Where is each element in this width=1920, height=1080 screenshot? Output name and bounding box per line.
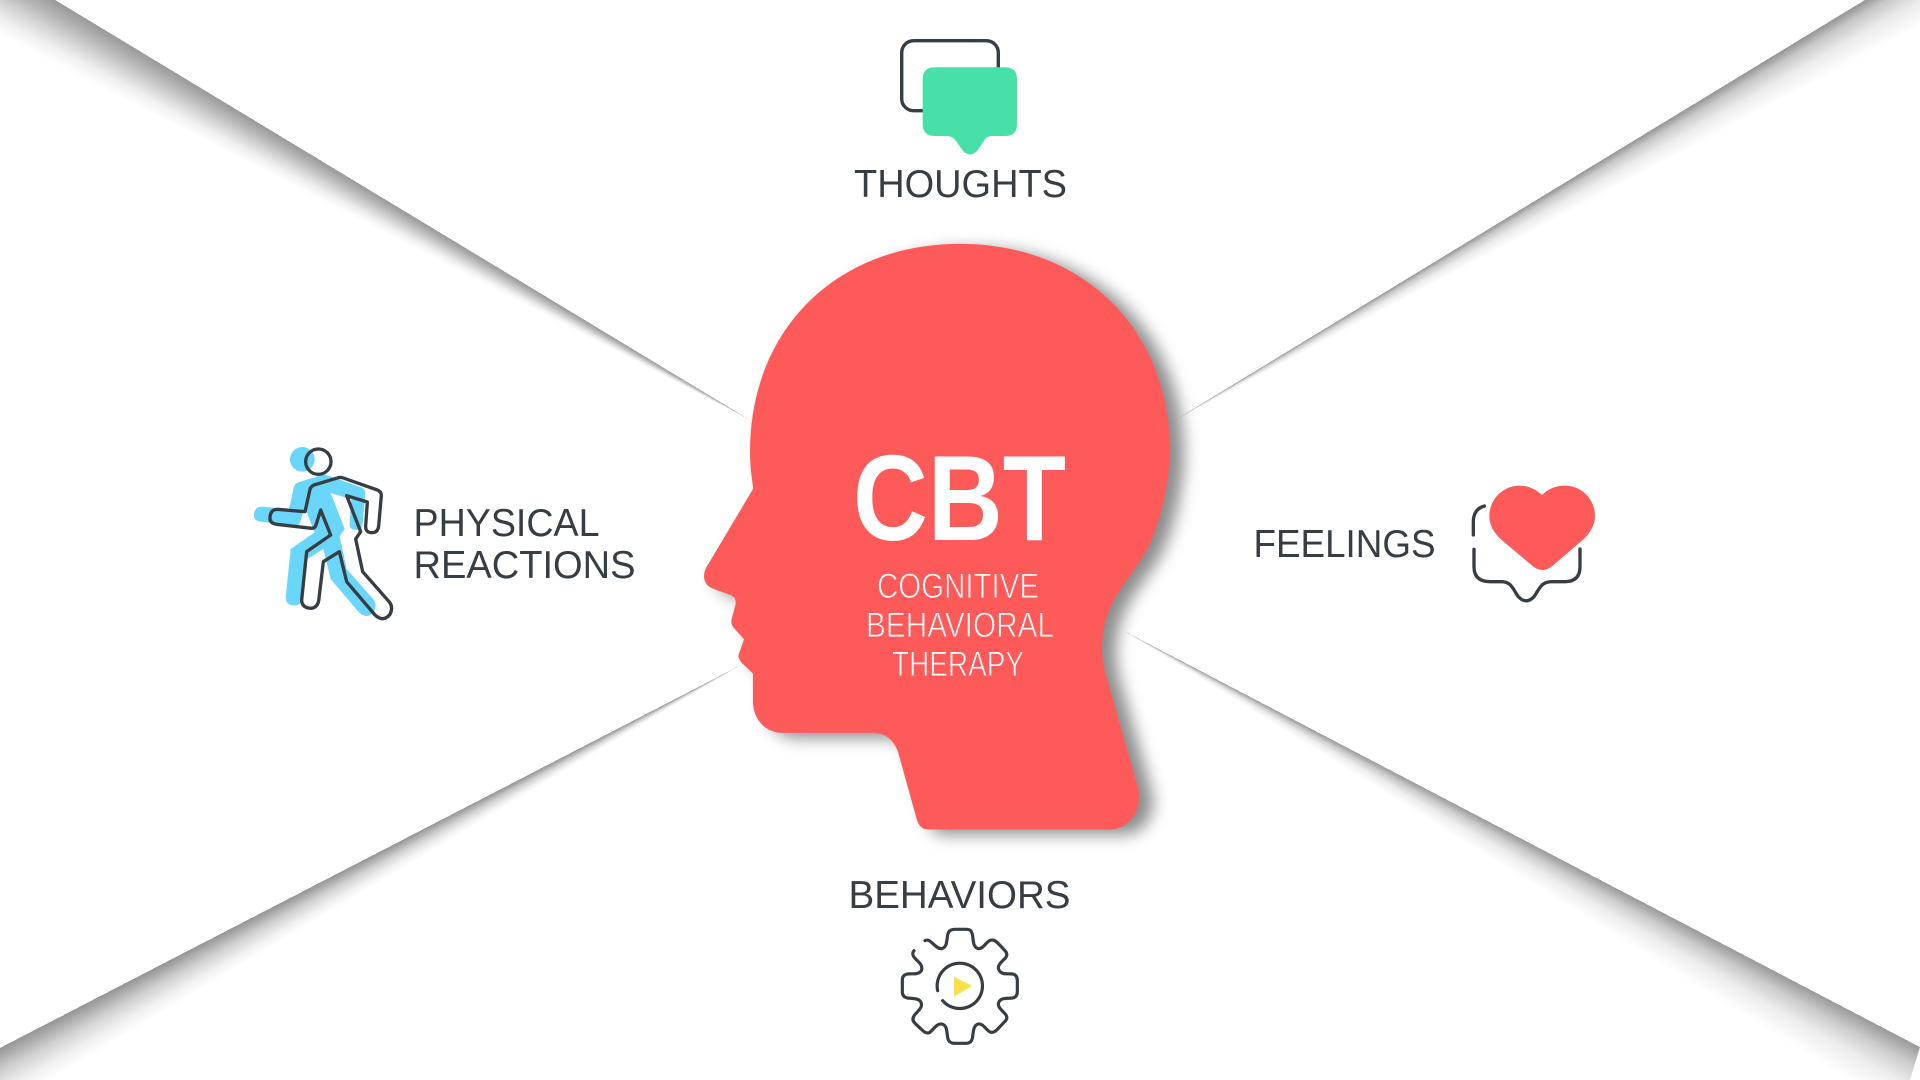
thoughts section xyxy=(854,41,1067,206)
physical reactions section xyxy=(254,447,636,619)
label: feelings: FEELINGS xyxy=(1254,523,1436,566)
icon: running person xyxy=(254,447,392,619)
subtitle: cognitive behavioral therapy: COGNITIVE xyxy=(877,567,1039,606)
label: physical reactions: REACTIONS xyxy=(414,544,636,587)
head silhouette xyxy=(704,244,1170,829)
label: thoughts: THOUGHTS xyxy=(854,163,1067,206)
subtitle: cognitive behavioral therapy: BEHAVIORAL xyxy=(866,606,1054,645)
label: physical reactions: PHYSICAL xyxy=(414,502,600,545)
title: CBT: CBT xyxy=(853,430,1066,566)
label: behaviors: BEHAVIORS xyxy=(848,874,1070,917)
icon: speech bubbles xyxy=(902,41,1017,155)
subtitle: cognitive behavioral therapy xyxy=(866,567,1054,684)
icon: gear with play button xyxy=(902,929,1017,1043)
behaviors section xyxy=(848,874,1070,1043)
subtitle: cognitive behavioral therapy: THERAPY xyxy=(892,645,1024,684)
head shadow xyxy=(718,249,1184,834)
head with CBT text xyxy=(704,244,1184,834)
feelings section xyxy=(1254,486,1595,601)
label: physical reactions xyxy=(414,502,636,587)
icon: heart speech bubble xyxy=(1473,486,1595,601)
